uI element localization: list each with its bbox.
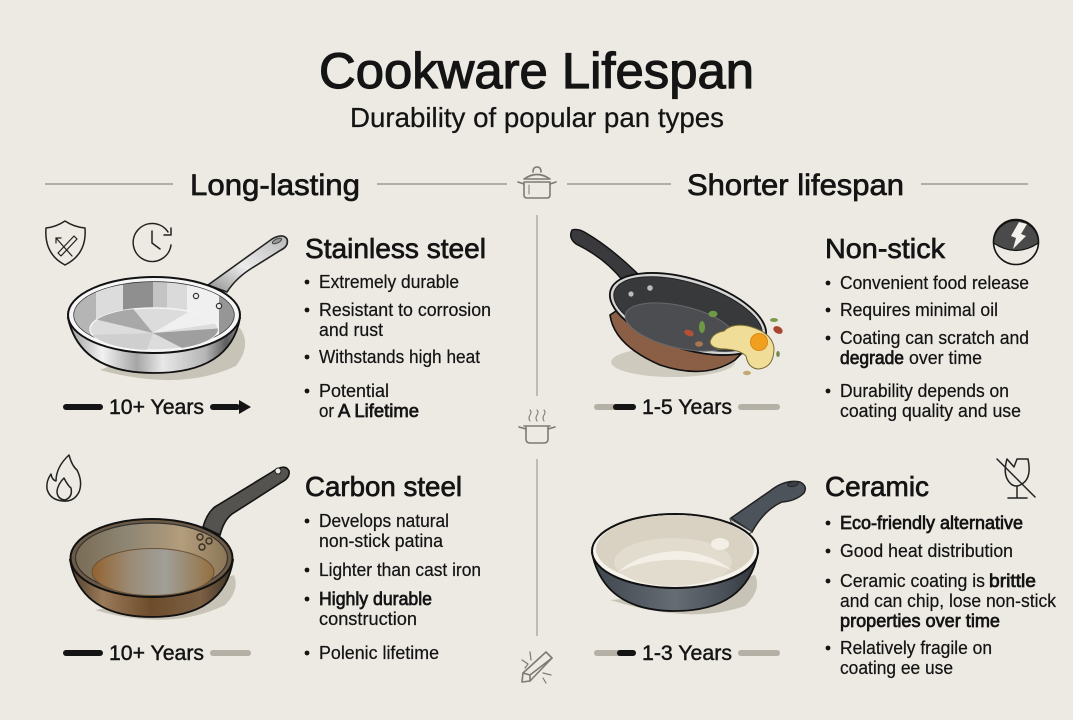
non-stick pan illustration — [571, 229, 784, 377]
bullet list: carbon steel: Lighter than cast iron — [319, 560, 481, 580]
bullet list: carbon steel: Develops natural — [319, 511, 449, 531]
icon: cracked coating — [994, 220, 1038, 264]
icon: steaming pot — [519, 410, 555, 443]
bullet list: non-stick: Coating can scratch and — [840, 328, 1029, 348]
bullet list: stainless steel — [305, 272, 491, 421]
lifespan bar: 10+ years — [63, 642, 251, 665]
bullet list: carbon steel — [305, 511, 481, 663]
bullet list: ceramic: properties over time — [840, 611, 1000, 631]
bullet list: ceramic: and can chip, lose non-stick — [840, 591, 1057, 611]
stainless steel pan illustration — [68, 236, 287, 380]
icon: cooking pot — [518, 167, 556, 198]
panel: ceramic — [592, 459, 1057, 678]
lifespan bar: 1-3 years — [594, 642, 780, 665]
bullet list: ceramic: Ceramic coating is — [840, 571, 985, 591]
panel: carbon steel — [47, 455, 481, 665]
bullet list: stainless steel: Withstands high heat — [319, 347, 480, 367]
bullet list: ceramic: brittle — [989, 571, 1036, 591]
icon: shield — [46, 221, 85, 265]
heading: carbon steel: Carbon steel — [305, 471, 462, 502]
bullet list: ceramic — [826, 513, 1057, 678]
bullet list: non-stick — [826, 273, 1029, 421]
bullet list: stainless steel: Extremely durable — [319, 272, 459, 292]
bullet list: non-stick: Requires minimal oil — [840, 300, 998, 320]
bullet list: non-stick: Durability depends on — [840, 381, 1009, 401]
bullet list: ceramic: Good heat distribution — [840, 541, 1013, 561]
subtitle: Durability of popular pan types — [350, 102, 724, 133]
lifespan bar: 1-5 years — [594, 396, 780, 419]
bullet list: stainless steel: or — [319, 401, 334, 421]
bullet list: carbon steel: non-stick patina — [319, 531, 444, 551]
carbon steel pan illustration — [70, 467, 289, 620]
heading: non-stick: Non-stick — [825, 233, 946, 264]
lifespan bar: 1-3 years: 1-3 Years — [642, 642, 732, 665]
panel: stainless steel — [46, 221, 491, 421]
bullet list: carbon steel: Polenic lifetime — [319, 643, 439, 663]
center divider — [536, 215, 538, 636]
bullet list: non-stick: Convenient food release — [840, 273, 1029, 293]
lifespan bar: 10+ years — [63, 396, 251, 419]
bullet list: ceramic: coating ee use — [840, 658, 953, 678]
heading: long-lasting: Long-lasting — [190, 169, 360, 202]
icon: clock — [133, 224, 171, 262]
bullet list: stainless steel: Resistant to corrosion — [319, 300, 491, 320]
bullet list: non-stick: over time — [909, 348, 982, 368]
bullet list: stainless steel: and rust — [319, 320, 383, 340]
bullet list: carbon steel: construction — [319, 609, 417, 629]
lifespan bar: 10+ years: 10+ Years — [109, 396, 204, 419]
lifespan bar: 10+ years: 10+ Years — [109, 642, 204, 665]
bullet list: stainless steel: Potential — [319, 381, 389, 401]
icon: scratched bar — [522, 652, 552, 683]
heading: stainless steel: Stainless steel — [305, 233, 486, 264]
ceramic pan illustration — [592, 480, 805, 614]
bullet list: non-stick: coating quality and use — [840, 401, 1021, 421]
heading: ceramic: Ceramic — [825, 471, 929, 502]
bullet list: carbon steel: Highly durable — [319, 589, 432, 609]
bullet list: stainless steel: A Lifetime — [338, 401, 419, 421]
bullet list: ceramic: Eco-friendly alternative — [840, 513, 1023, 533]
lifespan bar: 1-5 years: 1-5 Years — [642, 396, 732, 419]
panel: non-stick — [571, 220, 1038, 421]
heading: shorter lifespan: Shorter lifespan — [687, 169, 904, 202]
icon: flame — [47, 455, 81, 501]
bullet list: ceramic: Relatively fragile on — [840, 638, 992, 658]
icon: fragile glass — [997, 459, 1035, 498]
bullet list: non-stick: degrade — [840, 348, 904, 368]
title: Cookware Lifespan — [319, 43, 754, 99]
